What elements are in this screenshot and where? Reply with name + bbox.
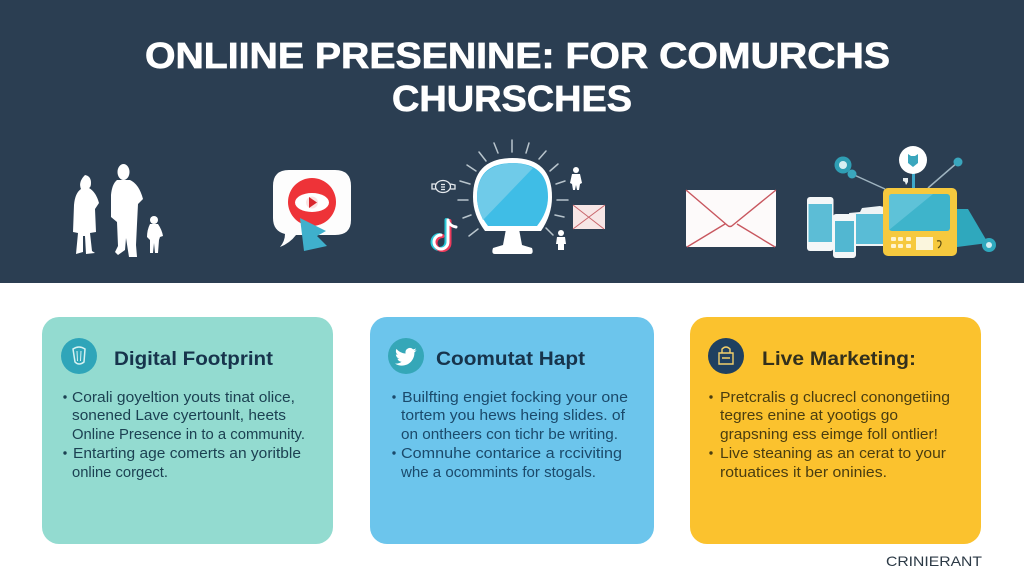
- icon: family silhouettes: [73, 164, 163, 257]
- tiktok note: [432, 220, 456, 250]
- bullet list: Corali goyeltion youts tinat olice,: [72, 390, 295, 406]
- trapezoid screen: [950, 209, 988, 247]
- icon: email envelope: [686, 190, 776, 247]
- yellow device: [883, 188, 957, 256]
- header band: [0, 0, 1024, 283]
- bullet list: [63, 390, 305, 481]
- rays: [458, 140, 568, 236]
- mask glyph: [432, 180, 455, 192]
- icon: footprint badge: [61, 338, 97, 374]
- small envelope: [573, 205, 605, 229]
- monitor: [473, 158, 552, 231]
- bullet list: grapsning ess eimge foll ontlier!: [720, 427, 938, 443]
- heading: Digital Footprint: [114, 349, 274, 370]
- bullet list: whe a ocommints for stogals.: [400, 465, 596, 481]
- bullet list: Pretcralis g clucrecl conongetiing: [720, 390, 950, 406]
- bullet list: tegres enine at yootigs go: [720, 408, 898, 424]
- icon: video chat bubble: [273, 170, 351, 251]
- heading: Live Marketing:: [762, 349, 916, 370]
- bullet list: [392, 390, 628, 481]
- icon: lock badge: [708, 338, 744, 374]
- icon: bird badge: [388, 338, 424, 374]
- bullet list: Comnuhe contarice a rcciviting: [401, 446, 622, 462]
- tablet: [849, 206, 888, 246]
- panel: live marketing: [690, 317, 981, 544]
- small person top: [570, 167, 582, 190]
- footer brand: CRINIERANT: [886, 553, 982, 569]
- title: ONLIINE PRESENINE: FOR COMURCHS: [145, 35, 890, 76]
- bullet list: rotuatices it ber oninies.: [720, 465, 887, 481]
- bullet list: Live steaning as an cerat to your: [720, 446, 946, 462]
- phone large: [807, 197, 834, 251]
- bullet list: tortem you hews heing slides. of: [401, 408, 626, 424]
- bullet list: on ontheers con tichr be writing.: [401, 427, 618, 443]
- bullet list: Online Presence in to a community.: [72, 427, 305, 443]
- panel: community: [370, 317, 654, 544]
- icon: connected devices: [807, 146, 996, 258]
- bullet list: online corgect.: [72, 465, 168, 481]
- phone small: [833, 214, 856, 258]
- bullet list: Builfting engiet focking your one: [402, 390, 628, 406]
- bullet list: Entarting age comerts an yoritble: [73, 446, 301, 462]
- bullet list: sonened Lave cyertounlt, heets: [72, 408, 286, 424]
- heading: Coomutat Hapt: [436, 349, 586, 370]
- title: CHURSCHES: [392, 78, 632, 119]
- icon: central monitor with rays: [432, 140, 605, 254]
- bullet list: [709, 390, 950, 481]
- panel: digital footprint: [42, 317, 333, 544]
- title: [145, 35, 890, 119]
- connectors: [852, 162, 958, 189]
- small person bottom: [556, 230, 566, 250]
